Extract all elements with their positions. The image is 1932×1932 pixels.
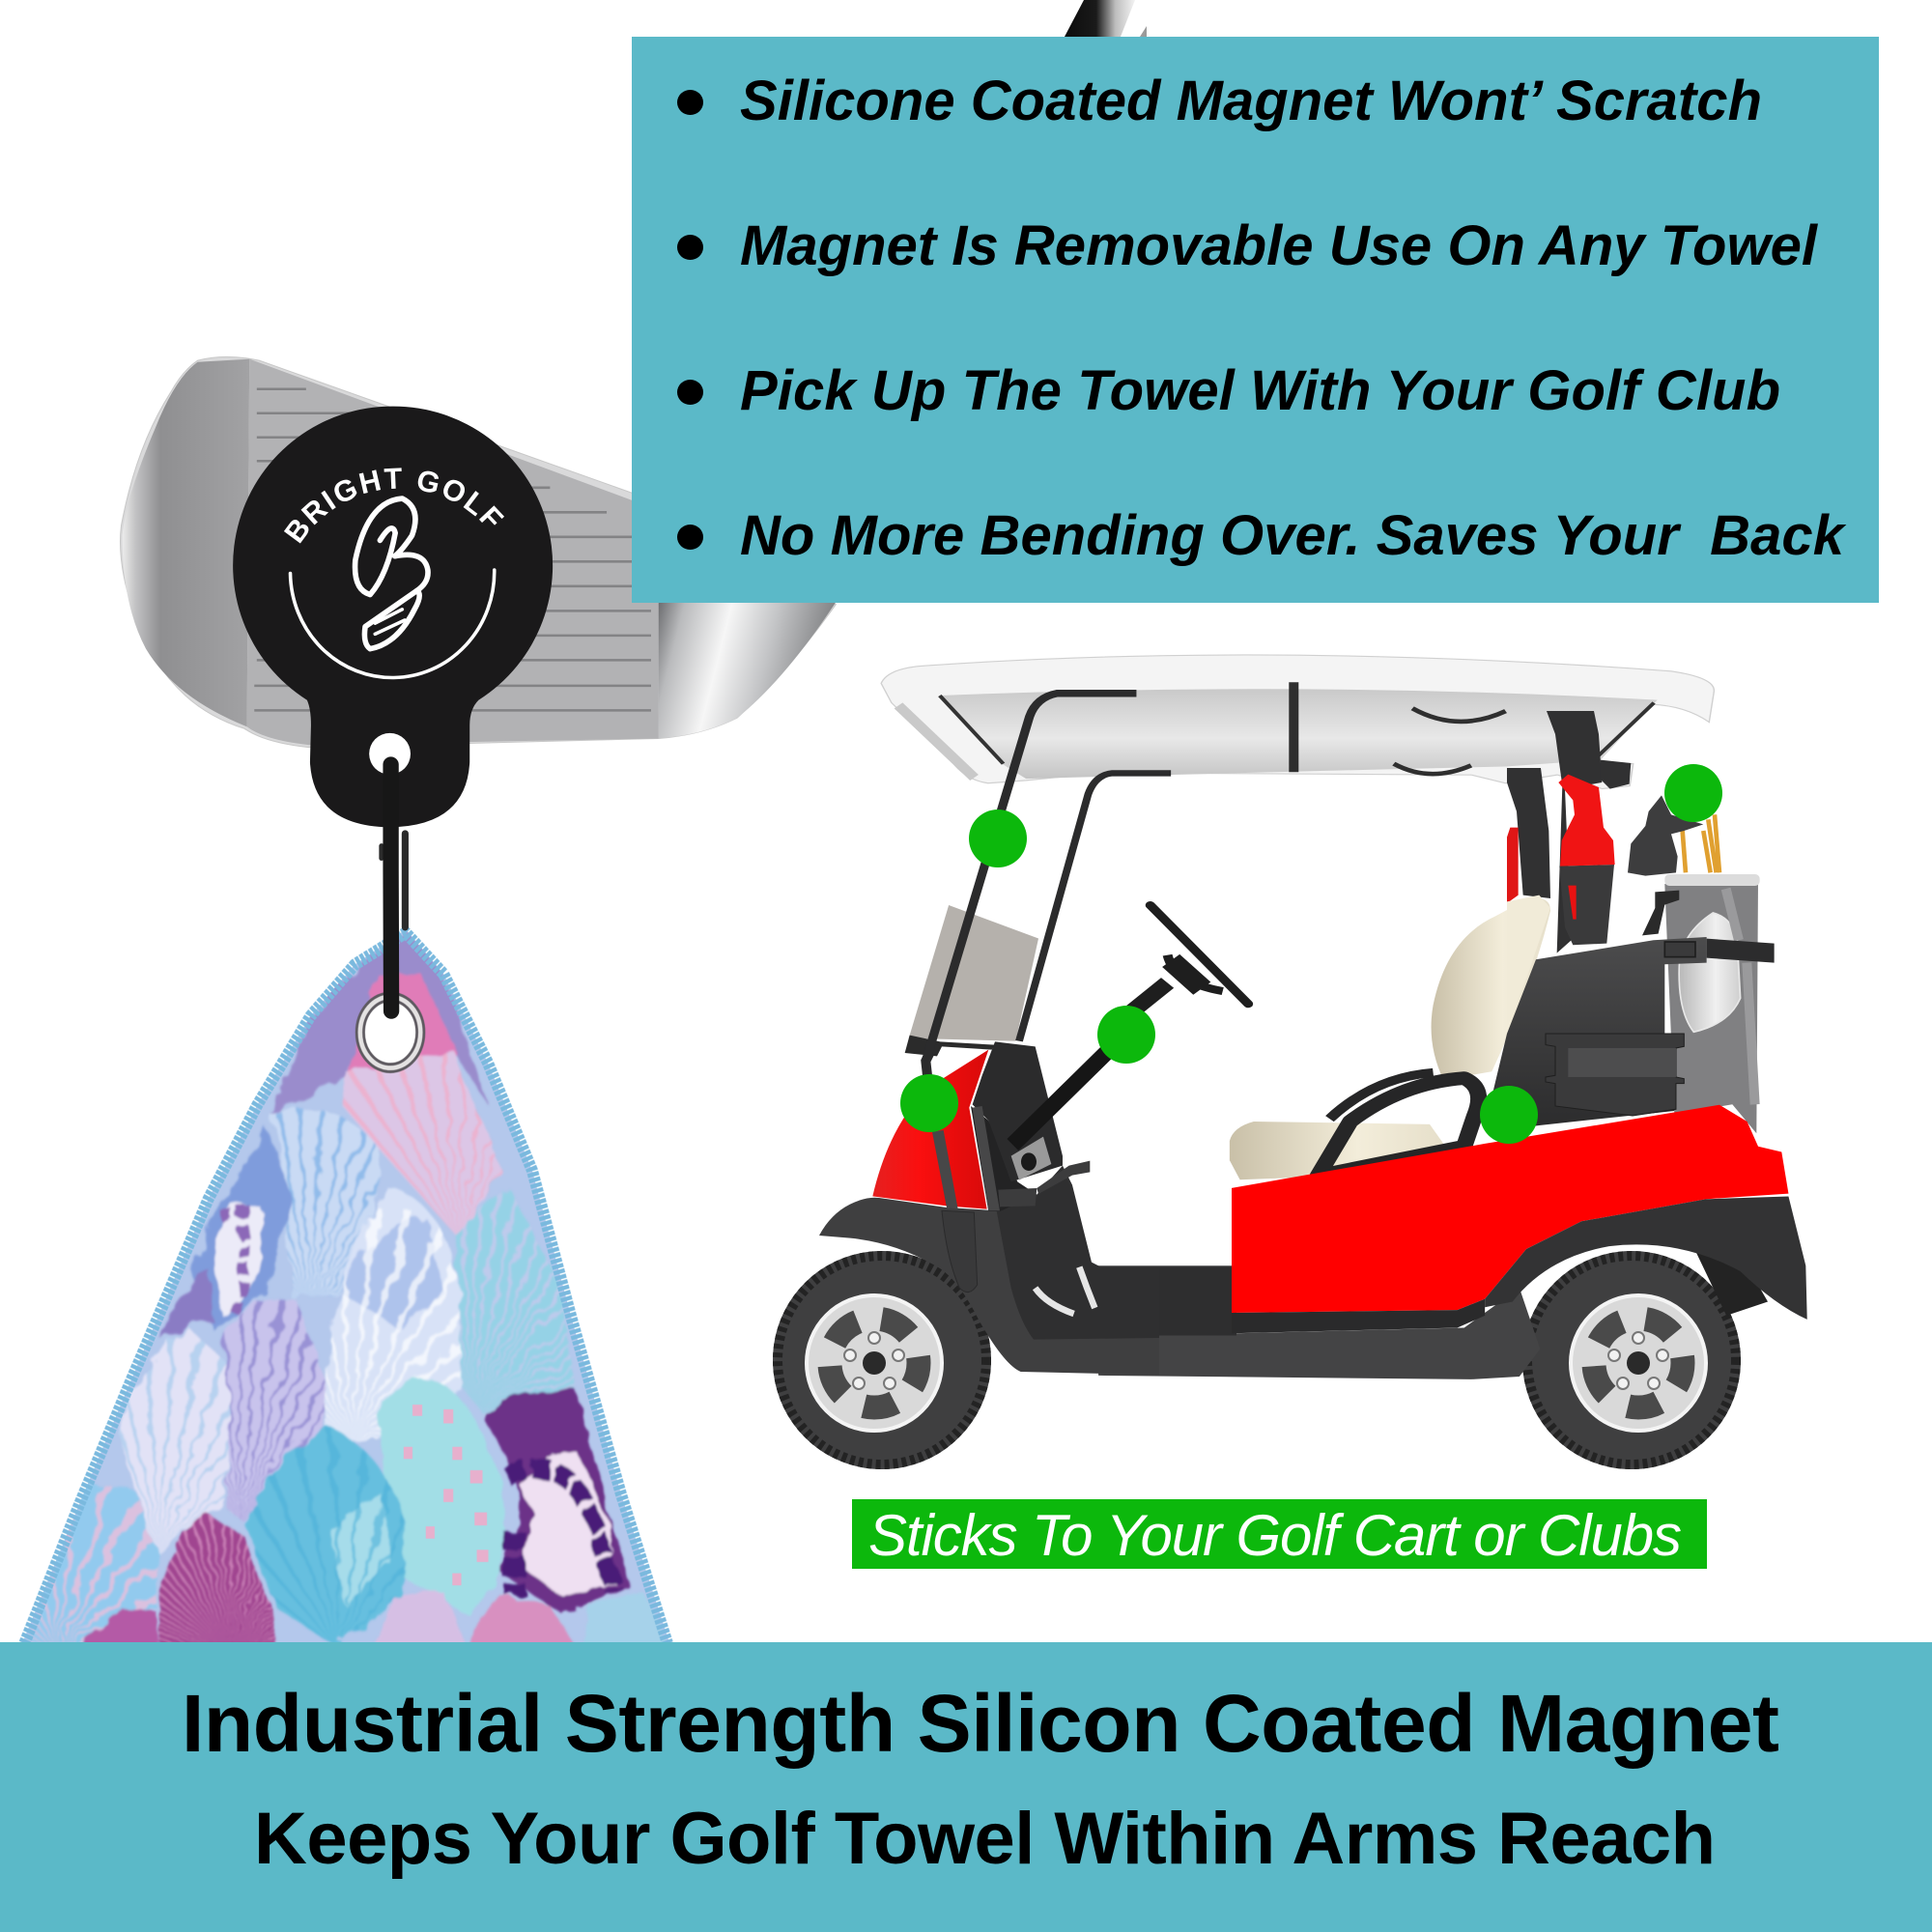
steering wheel	[1126, 905, 1248, 1016]
feature 1: Silicone Coated Magnet Wont’ Scratch	[740, 70, 1762, 132]
golf clubs	[1628, 795, 1719, 876]
magnet disc with Bright Golf logo: BRIGHT GOLF	[284, 468, 504, 543]
banner headline: Industrial Strength Silicon Coated Magnet	[182, 1678, 1779, 1769]
banner background	[0, 1642, 1932, 1932]
golf bag body	[1664, 884, 1758, 1133]
storage strap	[1707, 939, 1775, 963]
rear red body	[1232, 1105, 1788, 1313]
rear underbody shadow	[1691, 1243, 1768, 1316]
iron toe panel	[123, 359, 249, 726]
cooler face	[1568, 1048, 1676, 1077]
teal shell with pink dots	[377, 1378, 508, 1615]
iron hosel	[659, 595, 840, 738]
steering column	[1012, 1051, 1108, 1145]
floor and bottom rail	[1092, 1265, 1540, 1379]
windshield	[909, 905, 1038, 1041]
towel base fabric	[0, 918, 696, 1648]
feature 2: Magnet Is Removable Use On Any Towel	[740, 214, 1819, 277]
seat armrests	[1318, 1072, 1479, 1176]
red front cowl	[872, 1050, 988, 1209]
front fender	[819, 1198, 1159, 1375]
pedals	[1036, 1267, 1094, 1314]
towel with seashell pattern	[19, 927, 673, 1642]
golf club shaft top	[1065, 0, 1147, 37]
magnet disc with Bright Golf logo	[233, 406, 553, 1019]
magnet placement dots	[900, 764, 1722, 1144]
lilac top corner	[270, 929, 488, 1115]
bag side bracket	[1642, 891, 1679, 935]
towel zigzag hem	[24, 933, 668, 1643]
left white shell	[120, 1330, 230, 1549]
console head	[973, 1041, 1063, 1181]
left blue shell	[22, 1484, 156, 1648]
iron head body	[120, 356, 836, 748]
towel grommet	[360, 997, 420, 1068]
rear body and chassis	[1092, 1072, 1807, 1379]
golf bag rim	[1664, 874, 1760, 886]
magnet body	[233, 407, 553, 827]
front cowl, fender and console	[819, 1036, 1159, 1375]
seat back	[1432, 898, 1550, 1080]
console inner wall	[971, 1106, 1037, 1211]
bottom banner	[0, 1642, 1932, 1932]
small red handle	[1507, 828, 1519, 903]
blue watercolor shell	[246, 1428, 408, 1648]
strap buckle	[1664, 942, 1695, 957]
logo wordmark	[299, 489, 496, 545]
carabiner clip	[382, 765, 405, 1011]
big white-blue shell	[327, 1184, 463, 1442]
inner pillar	[1019, 773, 1171, 1041]
front pillar lower	[925, 1043, 934, 1075]
logo ring	[291, 570, 495, 677]
seat cushion	[1230, 1122, 1443, 1179]
lilac left shell	[190, 1128, 293, 1330]
pink fan shell	[342, 1049, 501, 1236]
pillars behind	[1507, 711, 1631, 953]
storage box	[1488, 937, 1707, 1128]
lower body band	[1232, 1299, 1485, 1333]
front pillars	[926, 694, 1171, 1061]
rear black fender	[1485, 1196, 1807, 1320]
banner subheadline: Keeps Your Golf Towel Within Arms Reach	[254, 1798, 1716, 1880]
logo script B	[355, 498, 428, 649]
cup holders	[998, 1161, 1090, 1207]
dark purple shell	[483, 1390, 630, 1615]
iron face grooves	[254, 389, 651, 710]
feature list panel	[632, 37, 1879, 603]
lower pink shells	[368, 1592, 466, 1648]
hanging hole	[369, 733, 411, 775]
golf iron head	[120, 356, 840, 748]
front windshield bracket	[905, 1036, 995, 1056]
floor panel	[1092, 1266, 1236, 1336]
green caption: Sticks To Your Golf Cart or Clubs	[868, 1503, 1682, 1568]
outer pillar	[926, 694, 1136, 1061]
seat back edge	[1507, 895, 1550, 1031]
feature 3: Pick Up The Towel With Your Golf Club	[740, 359, 1780, 422]
golf bag vertical strap	[1726, 889, 1755, 1104]
front wheel	[773, 1251, 991, 1469]
upper pale shell	[270, 1108, 382, 1301]
purple shell spokes	[505, 1467, 614, 1597]
right teal shell	[457, 1189, 577, 1414]
golf bag pocket	[1679, 913, 1741, 1032]
iron grooved face	[247, 359, 659, 745]
console lower column	[997, 1166, 1159, 1340]
panel background	[632, 37, 1879, 603]
pink dots	[404, 1405, 488, 1585]
ignition knob	[1021, 1152, 1037, 1171]
rear wheel	[1522, 1251, 1741, 1469]
red sprayer	[1558, 775, 1615, 945]
cooler box	[1546, 1034, 1684, 1116]
rear storage, sprayer and golf bag	[1488, 711, 1775, 1133]
magenta shell	[157, 1515, 275, 1648]
control panel	[1011, 1137, 1051, 1180]
fender side panel	[942, 1210, 978, 1293]
cart body and roof	[881, 655, 1768, 1316]
pillar strips	[932, 1106, 1000, 1210]
ribbed lilac shell	[222, 1298, 328, 1521]
golf cart illustration	[773, 655, 1807, 1469]
feature 4: No More Bending Over. Saves Your Back	[740, 504, 1847, 567]
roof canopy	[881, 655, 1714, 788]
